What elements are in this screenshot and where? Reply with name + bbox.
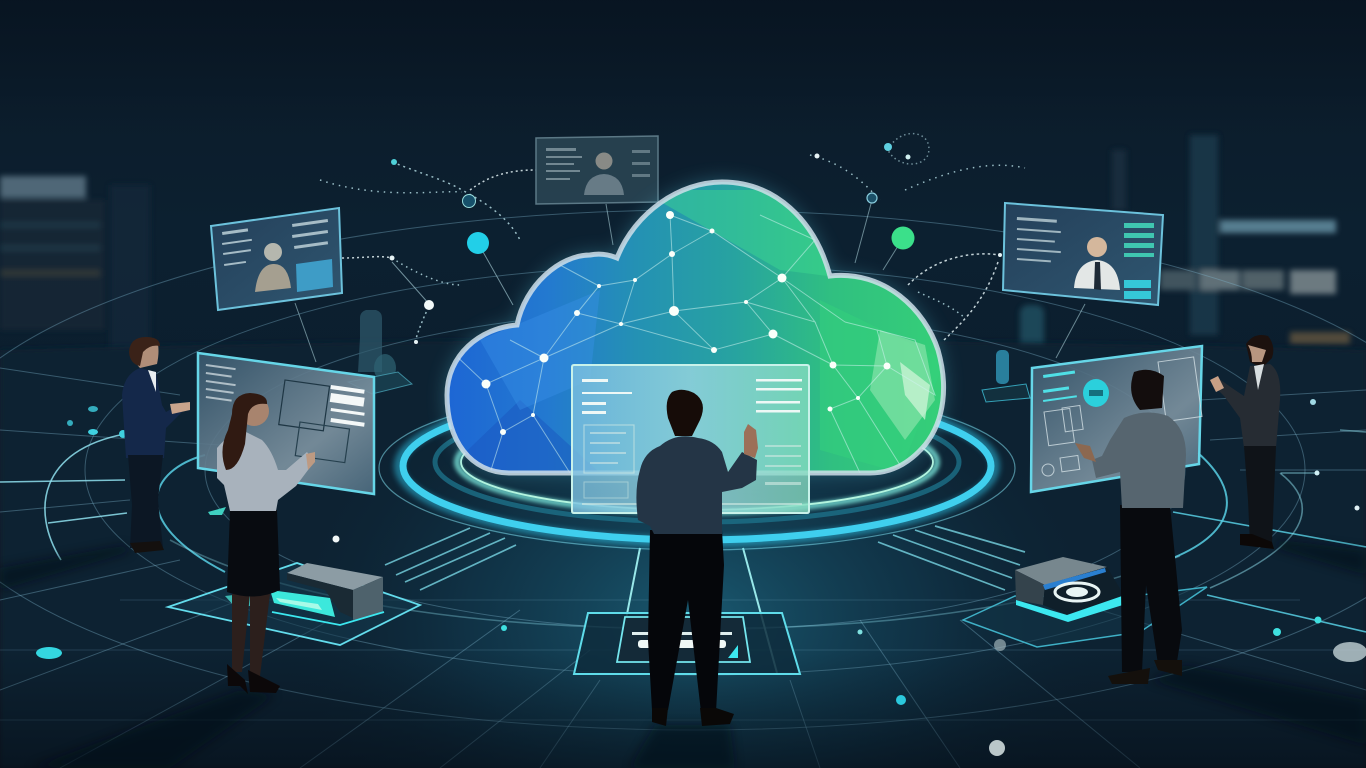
panel: right tablet: [1031, 346, 1202, 492]
background: blurred city left: [0, 176, 150, 355]
floor bright arcs: [0, 430, 1366, 632]
holographic platform rings: [379, 386, 1015, 550]
person: woman at left: [217, 393, 315, 694]
person: right front man: [1075, 370, 1186, 684]
panel: left tablet: [198, 353, 374, 494]
cloud mesh: [450, 215, 935, 473]
floor beams: [385, 526, 1025, 673]
connector nodes: [390, 143, 1002, 344]
background: blurred city right: [1020, 135, 1350, 365]
server base: left: [168, 563, 420, 645]
cloud shading facets: [664, 190, 856, 280]
server base: centre: [574, 613, 800, 674]
floor grid lines: [0, 210, 1366, 768]
person shadows: [0, 540, 1366, 768]
glowing floor dots: [36, 399, 1366, 756]
server base: right: [963, 557, 1207, 647]
cloud mesh nodes: [482, 211, 890, 435]
person: far left man: [122, 337, 190, 553]
panel: centre front: [572, 365, 809, 513]
top darkening: [0, 0, 1366, 130]
panel: top centre profile: [536, 136, 658, 204]
background: bottles and beacons: [348, 310, 1030, 402]
panel: upper right profile: [1003, 203, 1163, 305]
connector network: dotted arcs: [295, 134, 1085, 362]
floor: [0, 210, 1366, 768]
panel: upper left profile: [211, 208, 342, 310]
person: far right man: [1210, 335, 1280, 549]
cloud: [447, 182, 945, 473]
person: centre man: [636, 390, 758, 726]
